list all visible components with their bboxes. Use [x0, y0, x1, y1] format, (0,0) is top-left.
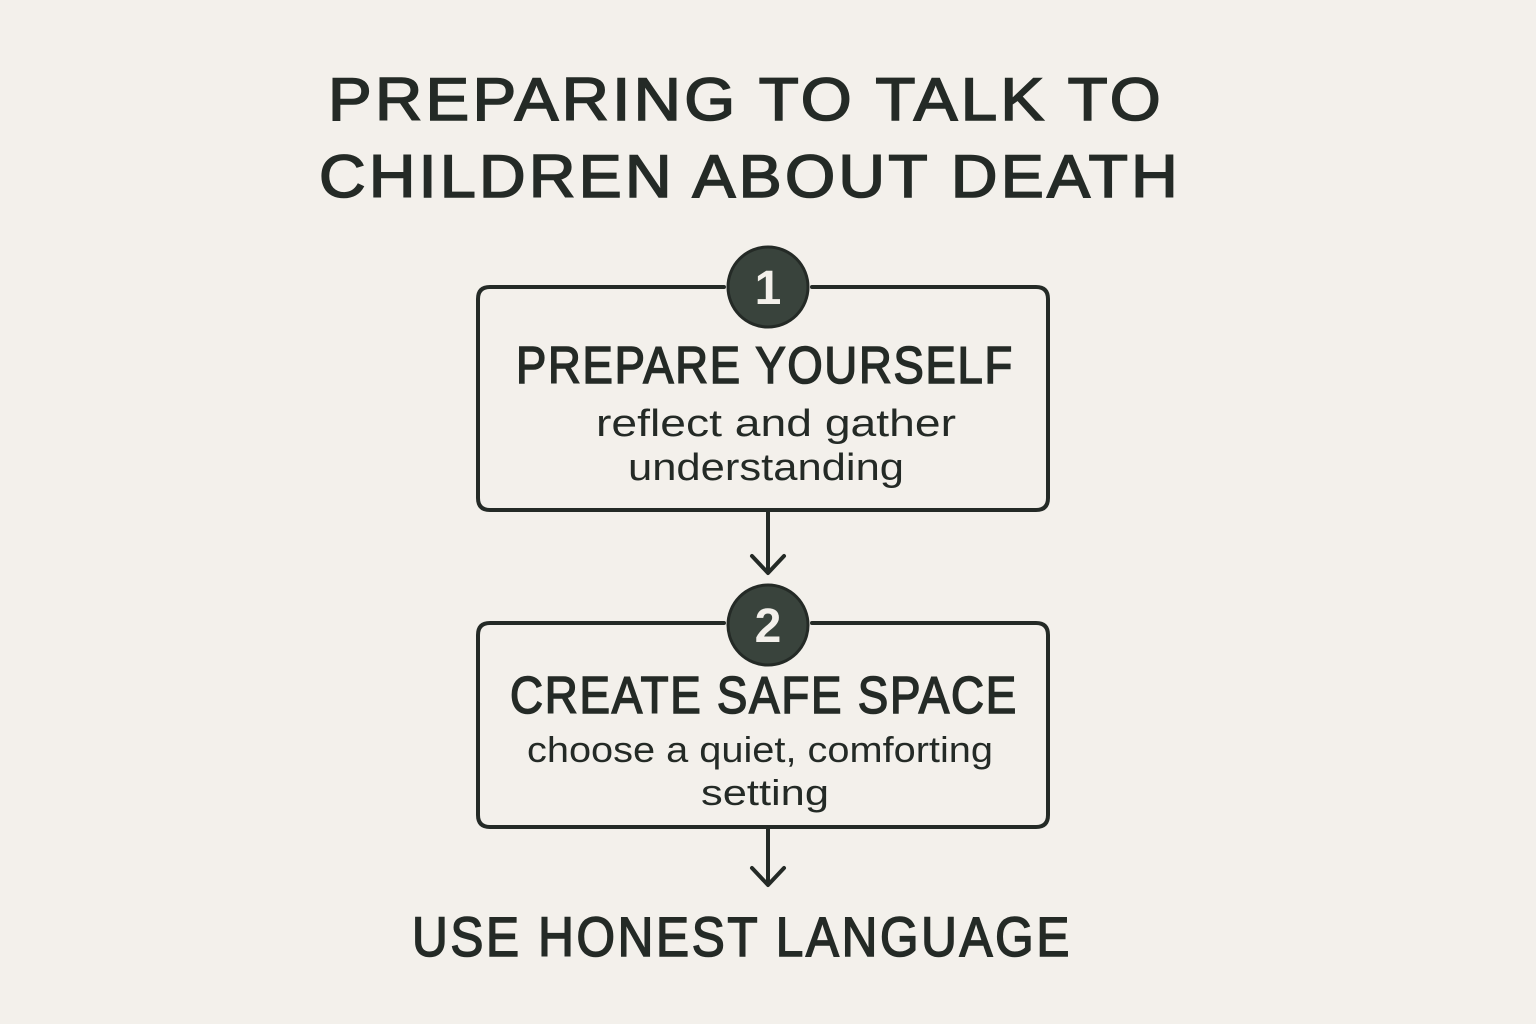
heading: create safe space: CREATE SAFE SPACE	[510, 667, 1018, 725]
arrow: step 2 to 3	[752, 829, 784, 885]
title: CHILDREN ABOUT DEATH	[319, 143, 1181, 210]
heading: use honest language: USE HONEST LANGUAGE	[412, 905, 1072, 968]
icon: number badge 2: 2	[755, 600, 781, 653]
text: description 2: choose a quiet, comforting	[527, 729, 993, 770]
panel: step 2 create safe space	[478, 585, 1048, 827]
panel: step 1 prepare yourself	[478, 247, 1048, 510]
arrow: step 1 to 2	[752, 512, 784, 573]
icon: number badge 1: 1	[755, 262, 781, 315]
title: PREPARING TO TALK TO	[328, 66, 1164, 133]
title	[319, 66, 1181, 210]
text: description 1: understanding	[628, 447, 904, 489]
heading: prepare yourself: PREPARE YOURSELF	[516, 337, 1014, 395]
text: description 1	[596, 403, 956, 489]
text: description 2: setting	[701, 772, 829, 813]
icon: number badge 1	[728, 247, 808, 327]
text: description 1: reflect and gather	[596, 403, 956, 445]
icon: number badge 2	[728, 585, 808, 665]
text: description 2	[527, 729, 993, 813]
